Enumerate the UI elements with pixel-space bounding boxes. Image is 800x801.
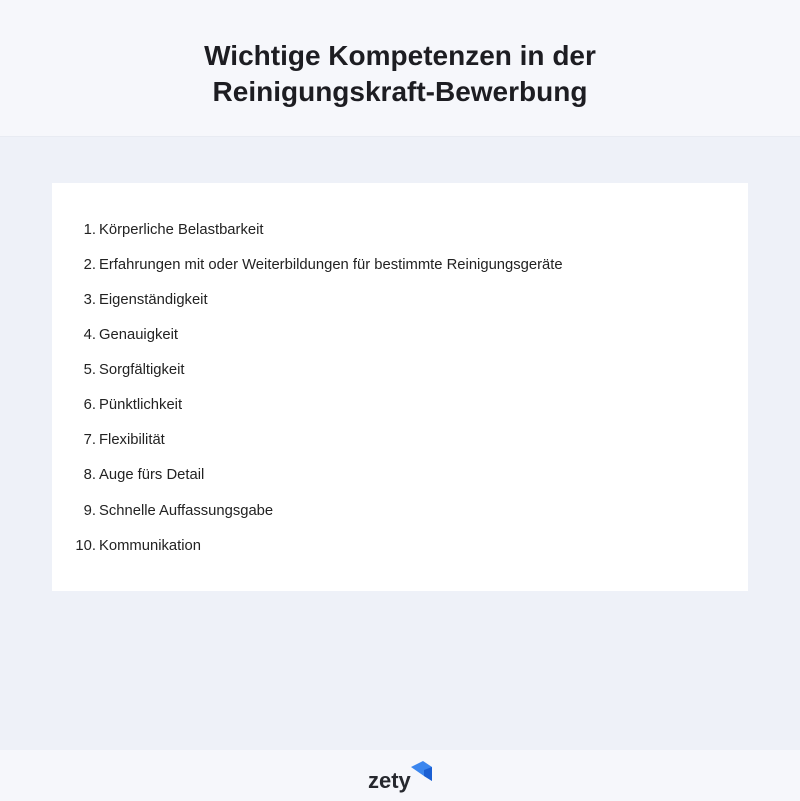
item 9: 9. xyxy=(84,503,96,519)
logo: zety xyxy=(368,761,432,793)
item 8: 8. xyxy=(84,467,96,483)
item 4: Genauigkeit xyxy=(99,327,178,343)
item 5: Sorgfältigkeit xyxy=(99,362,185,378)
item 8: Auge fürs Detail xyxy=(99,467,204,483)
item 1: Körperliche Belastbarkeit xyxy=(99,222,264,238)
item 7: 7. xyxy=(84,432,96,448)
logo: zety: zety xyxy=(368,768,412,793)
item 3: 3. xyxy=(84,292,96,308)
title xyxy=(204,40,596,107)
item 1: 1. xyxy=(84,222,96,238)
item 7: Flexibilität xyxy=(99,432,165,448)
item 6: Pünktlichkeit xyxy=(99,397,182,413)
title: Wichtige Kompetenzen in der xyxy=(204,40,596,71)
title: Reinigungskraft-Bewerbung xyxy=(213,76,587,107)
item 6: 6. xyxy=(84,397,96,413)
item 2: Erfahrungen mit oder Weiterbildungen für bestimmte Reinigungsgeräte xyxy=(99,257,563,273)
item 4: 4. xyxy=(84,327,96,343)
item 5: 5. xyxy=(84,362,96,378)
item 10: 10. xyxy=(75,538,96,554)
panel: skills list xyxy=(52,183,748,591)
item 3: Eigenständigkeit xyxy=(99,292,208,308)
item 9: Schnelle Auffassungsgabe xyxy=(99,503,273,519)
item 2: 2. xyxy=(84,257,96,273)
item 10: Kommunikation xyxy=(99,538,201,554)
